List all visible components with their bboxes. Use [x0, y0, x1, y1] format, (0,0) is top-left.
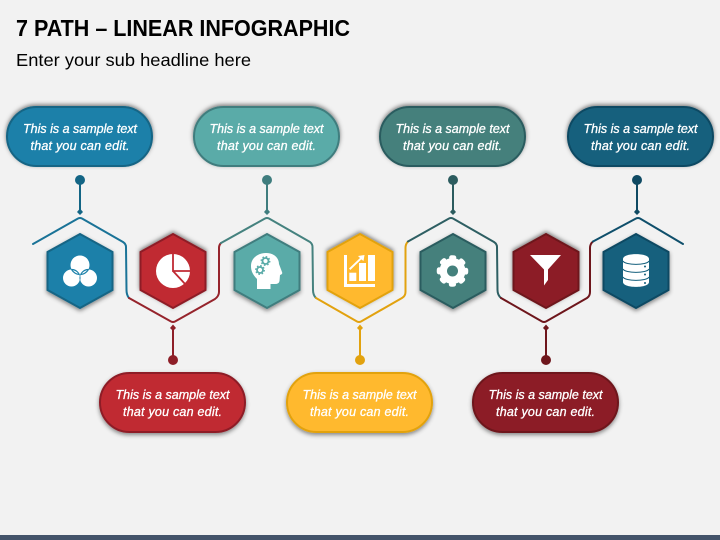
callout: navy [568, 107, 713, 166]
callout: dark red [473, 373, 618, 432]
hexagon: red [140, 234, 206, 308]
callout: yellow [287, 373, 432, 432]
connector: dark red [541, 324, 551, 365]
callout: dark teal: that you can edit. [403, 139, 502, 153]
callout: teal: This is a sample text [210, 122, 324, 136]
icon: gear [439, 258, 466, 284]
icon: head with gears [251, 253, 282, 289]
hexagon: blue [48, 234, 112, 308]
icon: funnel [530, 255, 561, 286]
hexagon: teal [234, 234, 300, 308]
path line: dark red [501, 242, 593, 322]
connector: red [168, 324, 178, 365]
hexagon: navy [604, 234, 668, 308]
title: 7 PATH – LINEAR INFOGRAPHIC [16, 15, 350, 41]
callout: dark teal [380, 107, 525, 166]
callout: blue: that you can edit. [30, 139, 130, 153]
callout: blue [7, 107, 152, 166]
hexagon: yellow [328, 234, 392, 308]
callout: navy: This is a sample text [584, 122, 698, 136]
path line: teal [221, 218, 316, 298]
callout: blue: This is a sample text [23, 122, 138, 136]
callout: teal [194, 107, 339, 166]
connector: yellow [355, 324, 365, 365]
callout: teal: that you can edit. [217, 139, 316, 153]
callout: yellow: that you can edit. [310, 405, 409, 419]
callout: red: This is a sample text [116, 388, 230, 402]
icon: database [623, 254, 649, 287]
icon: pie chart [156, 253, 191, 288]
path line: red [129, 243, 221, 322]
callout: red [100, 373, 245, 432]
callout: yellow: This is a sample text [302, 388, 417, 402]
hexagon: dark red [514, 234, 578, 308]
hexagon: dark teal [420, 234, 486, 308]
icon: bar chart with arrow [344, 255, 375, 287]
callout: dark teal: This is a sample text [396, 122, 510, 136]
path line: navy [593, 218, 683, 244]
path line: dark teal [408, 218, 501, 298]
connector: dark teal [448, 175, 458, 215]
connector: teal [262, 175, 272, 215]
connector: navy [632, 175, 642, 215]
connector: blue [75, 175, 85, 215]
callout: dark red: This is a sample text [488, 388, 603, 402]
callout: red: that you can edit. [123, 405, 222, 419]
path line: blue [33, 218, 129, 298]
path line: yellow [316, 242, 408, 322]
footer bar [0, 535, 720, 540]
icon: venn circles [63, 256, 97, 286]
callout: navy: that you can edit. [591, 139, 690, 153]
subtitle: Enter your sub headline here [16, 50, 251, 70]
callout: dark red: that you can edit. [496, 405, 595, 419]
